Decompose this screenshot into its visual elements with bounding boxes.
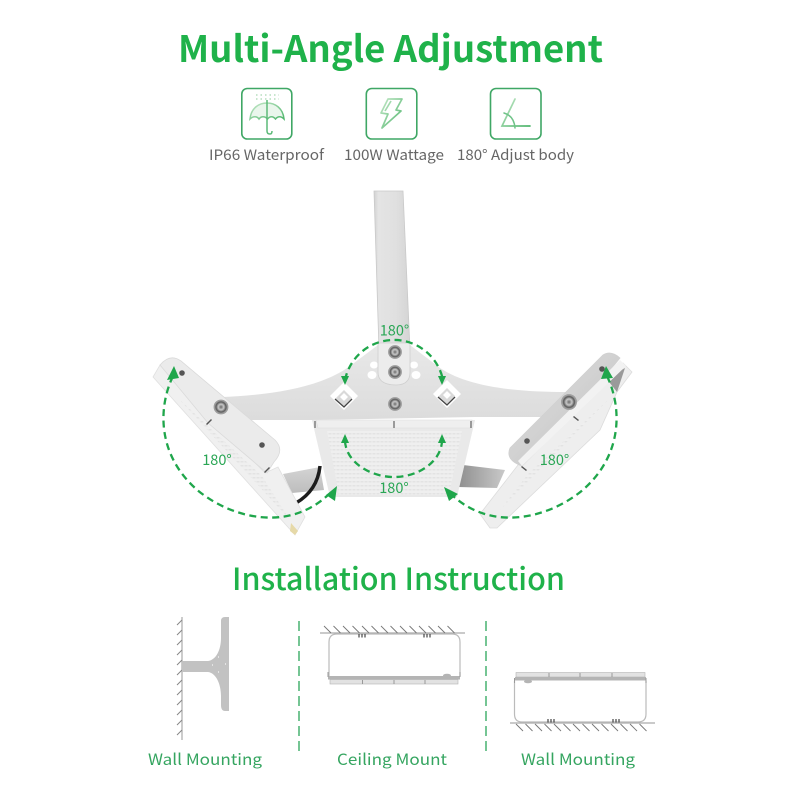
right LED panel	[480, 363, 632, 528]
product: flood light with three panels	[153, 191, 632, 535]
label: left 180: 180°	[202, 449, 232, 470]
label: 100W Wattage: 100W Wattage	[344, 144, 444, 165]
title: Multi-Angle Adjustment	[178, 20, 603, 73]
heading: installation instruction: Installation Instruction	[232, 555, 565, 599]
label: bottom 180: 180°	[379, 477, 409, 498]
label: wall mounting left: Wall Mounting	[148, 748, 262, 770]
rear strips	[283, 465, 505, 493]
arrow: bottom 180 arc	[345, 441, 442, 477]
icon box: wattage	[366, 88, 417, 139]
left diamond bracket	[330, 382, 358, 410]
divider	[299, 621, 486, 752]
screws	[214, 346, 576, 414]
label: top 180: 180°	[380, 320, 409, 340]
angle labels	[202, 320, 569, 498]
left LED panel	[153, 365, 305, 535]
arrow: top 180 arc	[345, 340, 443, 380]
diagram: ceiling mount	[320, 626, 465, 684]
center mounting plate	[378, 343, 410, 385]
diagram: floor wall mounting	[510, 672, 655, 731]
feature: 100W Wattage	[344, 88, 444, 165]
arrow: left 180 arc	[163, 376, 328, 518]
label: 180 Adjust body: 180° Adjust body	[457, 144, 574, 165]
mounting labels	[148, 748, 635, 770]
left mounting bracket	[160, 358, 280, 473]
label: right 180: 180°	[540, 449, 569, 470]
small bracket holes and slots	[179, 366, 605, 473]
vertical arm	[374, 191, 410, 350]
rotation arrows	[163, 340, 617, 518]
feature: 180 degree adjust body	[457, 88, 574, 165]
plate holes	[368, 362, 420, 379]
diagram: wall mounting side view	[177, 617, 229, 740]
label: IP66 Waterproof: IP66 Waterproof	[209, 144, 325, 165]
right diamond bracket	[433, 380, 461, 408]
arrowheads	[167, 366, 613, 501]
icon: lightning bolt	[381, 99, 402, 128]
center LED panel	[312, 420, 475, 497]
edge strip of right panel	[518, 360, 626, 466]
arrow: right 180 arc	[452, 376, 617, 518]
feature: IP66 Waterproof	[209, 88, 325, 165]
wing bracket	[215, 345, 573, 420]
label: wall mounting right: Wall Mounting	[521, 748, 635, 770]
icon: umbrella	[242, 88, 292, 139]
icon: angle	[490, 88, 541, 139]
right mounting bracket	[509, 353, 620, 466]
cable	[296, 466, 320, 503]
label: ceiling mount: Ceiling Mount	[337, 748, 447, 770]
